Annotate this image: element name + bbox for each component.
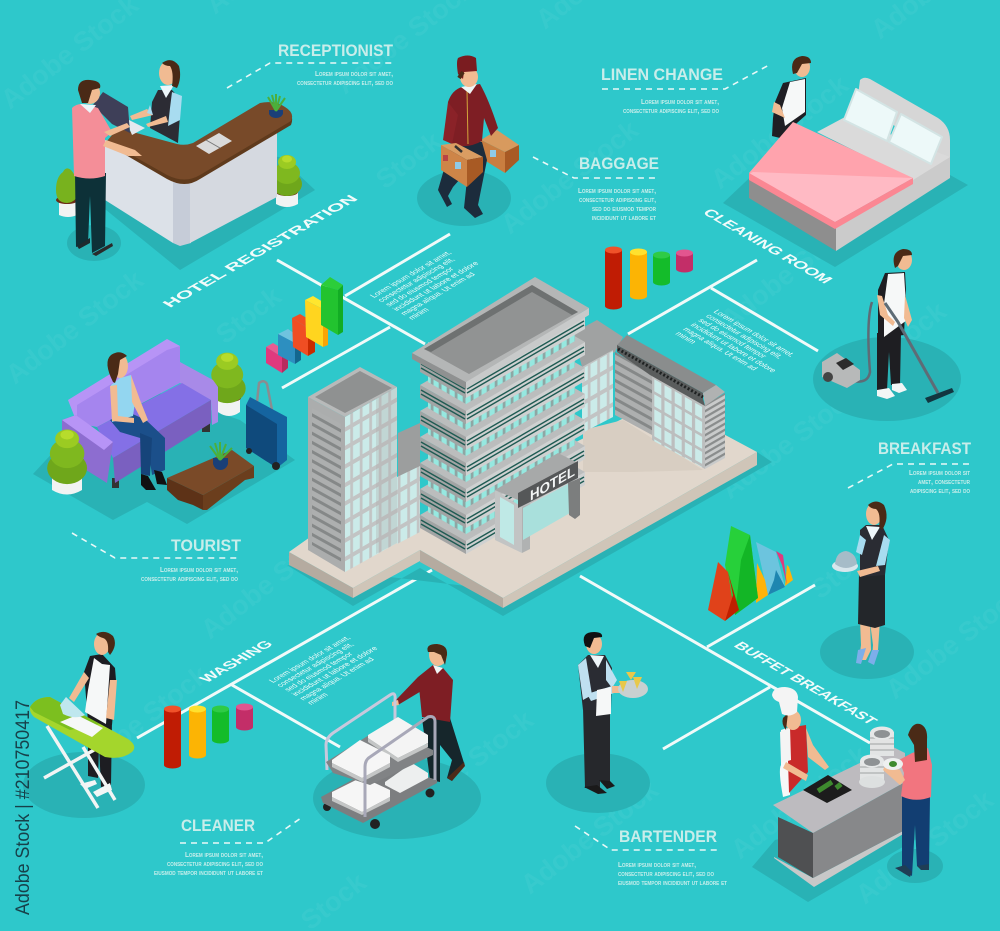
panel: bartender waiter <box>546 632 650 813</box>
coffee table <box>167 450 254 510</box>
heading: breakfast <box>848 439 972 495</box>
text block: hotel registration: sed do eiusmod tempor <box>383 266 456 308</box>
text block: hotel registration <box>368 247 497 321</box>
heading: cleaner: Lorem ipsum dolor sit amet, <box>185 852 263 859</box>
heading: cleaner: eiusmod tempor incididunt ut labore et <box>154 870 263 877</box>
hotel entrance <box>495 453 580 553</box>
watermark: Adobe Stock <box>705 69 855 195</box>
drinks tray <box>618 672 648 698</box>
heading: receptionist <box>227 41 394 88</box>
sofa <box>62 339 218 488</box>
text block: washing: incididunt ut labore et dolore <box>290 645 380 697</box>
tablet <box>129 120 145 135</box>
rear wing <box>573 320 623 433</box>
heading: baggage: Lorem ipsum dolor sit amet, <box>578 188 656 195</box>
linen cart <box>321 694 437 829</box>
heading: breakfast: amet, consectetur <box>918 479 970 486</box>
cylinder chart: washing <box>164 704 253 768</box>
heading: tourist: consectetur adipiscing elit, sed do <box>141 576 238 583</box>
left tower <box>308 367 397 572</box>
lounge shadow <box>33 380 295 524</box>
text block: hotel registration: incididunt ut labore et dolore <box>391 260 481 312</box>
floor shadow <box>313 757 481 839</box>
waitress <box>856 502 890 665</box>
counter <box>773 747 905 887</box>
cylinder: pink <box>676 250 693 272</box>
heading: receptionist: Lorem ipsum dolor sit amet, <box>315 71 393 78</box>
left connector <box>397 423 420 544</box>
back plant <box>209 353 246 416</box>
customer shadow <box>887 849 943 883</box>
headboard <box>858 78 950 177</box>
text block: cleaning room: incididunt ut labore et dolore <box>688 322 779 374</box>
bed shadow <box>723 130 968 267</box>
watermark: Stock <box>805 535 882 605</box>
vacuum cleaner <box>822 302 872 388</box>
bar: yellow <box>305 296 328 347</box>
text block: cleaning room: sed do eiusmod tempor <box>696 317 769 359</box>
text block: hotel registration: consectetur adipiscing elit, <box>376 256 457 303</box>
reception desk <box>105 102 292 246</box>
heading: cleaner <box>154 816 301 877</box>
watermark: Adobe Stock <box>390 704 540 830</box>
watermark: Adobe Stock <box>65 659 215 785</box>
isometric label: buffet breakfast: BUFFET BREAKFAST <box>730 640 880 727</box>
heading: receptionist: RECEPTIONIST <box>278 41 394 60</box>
pink sheet <box>749 122 913 229</box>
left suitcase <box>441 143 483 187</box>
bar chart: hotel registration <box>266 277 343 373</box>
watermark: Adobe Stock <box>715 379 865 505</box>
text block: cleaning room: consectetur adipiscing elit, <box>704 313 785 360</box>
floor shadow <box>23 752 145 818</box>
connector lines: hotel registration <box>277 234 450 388</box>
platform shadow <box>287 452 772 616</box>
heading: baggage: sed do eiusmod tempor <box>592 206 656 213</box>
cylinder: yellow <box>189 706 206 758</box>
right wing <box>615 335 725 469</box>
heading: cleaner: consectetur adipiscing elit, sed do <box>167 861 263 868</box>
heading: baggage: incididunt ut labore et <box>592 215 656 222</box>
left plant <box>56 168 78 217</box>
mountain chart: breakfast <box>708 526 793 621</box>
porter <box>392 644 465 782</box>
heading: bartender <box>575 826 727 887</box>
right plant <box>272 155 302 207</box>
watermark: Adobe Stock <box>515 774 665 900</box>
panel: buffet counter <box>752 687 943 902</box>
text block: cleaning room: magna aliqua. Ut enim ad <box>681 326 760 372</box>
watermark: Adobe Stock <box>195 519 345 645</box>
watermark: Stock <box>370 125 447 195</box>
panel: reception <box>56 60 315 270</box>
watermark: Adobe Stock <box>850 784 1000 910</box>
panel: tourist lounge <box>33 339 295 524</box>
hotel guest man <box>72 80 142 256</box>
watermark: Adobe Stock <box>725 739 875 865</box>
watermark: Stock <box>875 295 952 365</box>
cylinder: pink <box>236 704 253 730</box>
panel: vacuum cleaning maid <box>813 249 961 421</box>
heading: baggage <box>533 154 659 222</box>
receptionist <box>130 60 182 143</box>
maid <box>69 632 117 797</box>
suitcase <box>246 381 287 470</box>
panel: waitress with cloche <box>820 502 914 679</box>
bar: pink <box>266 343 288 373</box>
bar: blue <box>278 329 301 364</box>
text block: washing: Lorem ipsum dolor sit amet, <box>267 634 353 684</box>
ironing board <box>30 697 134 808</box>
isometric label: washing: WASHING <box>197 638 277 685</box>
watermark: Adobe Stock <box>715 209 865 335</box>
monitor <box>93 92 130 133</box>
bed base <box>836 157 950 251</box>
counter shadow <box>752 810 927 902</box>
watermark: Adobe Stock <box>495 114 645 240</box>
table plant <box>210 442 232 470</box>
bar: green <box>321 277 343 335</box>
panel: ironing maid <box>23 632 145 818</box>
floor shadow <box>813 337 961 421</box>
isometric label: cleaning room: CLEANING ROOM <box>699 207 835 286</box>
heading: cleaner: CLEANER <box>181 816 255 835</box>
watermark: Adobe Stock <box>0 264 150 390</box>
connector lines: buffet breakfast <box>580 576 870 749</box>
seated tourist <box>107 352 167 490</box>
hotel building <box>287 277 772 616</box>
vacuum wand <box>885 303 954 403</box>
main tower floors <box>420 290 585 554</box>
cylinder: red <box>164 706 181 768</box>
plate stacks <box>859 726 894 788</box>
text block: hotel registration: magna aliqua. Ut enim ad <box>398 271 477 317</box>
cylinder: yellow <box>630 248 647 300</box>
customer <box>883 724 932 877</box>
heading: bartender: eiusmod tempor incididunt ut labore et <box>618 880 727 887</box>
desk shadow <box>100 150 315 270</box>
heading: linen change: consectetur adipiscing elit, sed do <box>623 108 719 115</box>
right suitcase <box>481 130 519 173</box>
heading: breakfast: adipiscing elit, sed do <box>910 488 970 495</box>
stock credit: Adobe Stock | #210750417 <box>13 700 34 915</box>
heading: breakfast: Lorem ipsum dolor sit <box>909 470 970 477</box>
waiter <box>578 632 620 794</box>
heading: bartender: consectetur adipiscing elit, sed do <box>618 871 714 878</box>
isometric label: hotel registration: HOTEL REGISTRATION <box>160 193 362 310</box>
front plant <box>47 430 87 494</box>
housekeeper <box>772 56 811 138</box>
heading: bartender: BARTENDER <box>619 827 717 846</box>
heading: bartender: Lorem ipsum dolor sit amet, <box>618 862 696 869</box>
heading: breakfast: BREAKFAST <box>878 439 972 458</box>
chef <box>772 687 829 797</box>
text block: washing <box>267 632 396 706</box>
text block: washing: sed do eiusmod tempor <box>282 651 355 693</box>
desk plant <box>268 94 285 118</box>
heading: baggage: consectetur adipiscing elit, <box>579 197 656 204</box>
text block: hotel registration: minim <box>406 306 431 321</box>
heading: linen change <box>601 65 769 115</box>
connector lines: cleaning room <box>628 260 818 351</box>
floor shadow <box>820 625 914 679</box>
bellboy <box>438 56 498 218</box>
maid <box>877 249 912 399</box>
heading: linen change: LINEN CHANGE <box>601 65 723 84</box>
heading: linen change: Lorem ipsum dolor sit amet, <box>641 99 719 106</box>
platform <box>289 400 757 608</box>
hotel sign: HOTEL <box>530 462 575 504</box>
bar: red <box>292 314 315 356</box>
text block: washing: magna aliqua. Ut enim ad <box>297 656 376 702</box>
floor shadow <box>417 170 511 226</box>
cloche <box>832 551 858 572</box>
text block: cleaning room <box>673 308 802 383</box>
text block: cleaning room: Lorem ipsum dolor sit amet, <box>711 308 797 358</box>
panel: porter with linen cart <box>313 644 481 839</box>
heading: baggage: BAGGAGE <box>579 154 659 173</box>
cylinder: green <box>653 252 670 286</box>
panel: baggage bellboy <box>417 56 519 226</box>
text block: washing: minim <box>305 691 330 706</box>
floor shadow <box>546 753 650 813</box>
watermark: Stock <box>210 280 287 350</box>
cylinder chart: baggage <box>605 246 693 310</box>
man floor shadow <box>67 225 121 261</box>
pillows <box>844 89 942 164</box>
main tower roof <box>412 277 589 389</box>
text block: hotel registration: Lorem ipsum dolor sit amet, <box>368 249 454 299</box>
heading: tourist <box>72 533 242 583</box>
heading: tourist: TOURIST <box>171 536 242 555</box>
heading: tourist: Lorem ipsum dolor sit amet, <box>160 567 238 574</box>
text block: washing: consectetur adipiscing elit, <box>275 641 356 688</box>
text block: cleaning room: minim <box>673 330 699 345</box>
cylinder: green <box>212 706 229 744</box>
panel: linen change bed <box>723 56 968 267</box>
connector lines: washing <box>137 570 432 747</box>
cylinder: red <box>605 246 622 310</box>
heading: receptionist: consectetur adipiscing elit, sed do <box>297 80 393 87</box>
